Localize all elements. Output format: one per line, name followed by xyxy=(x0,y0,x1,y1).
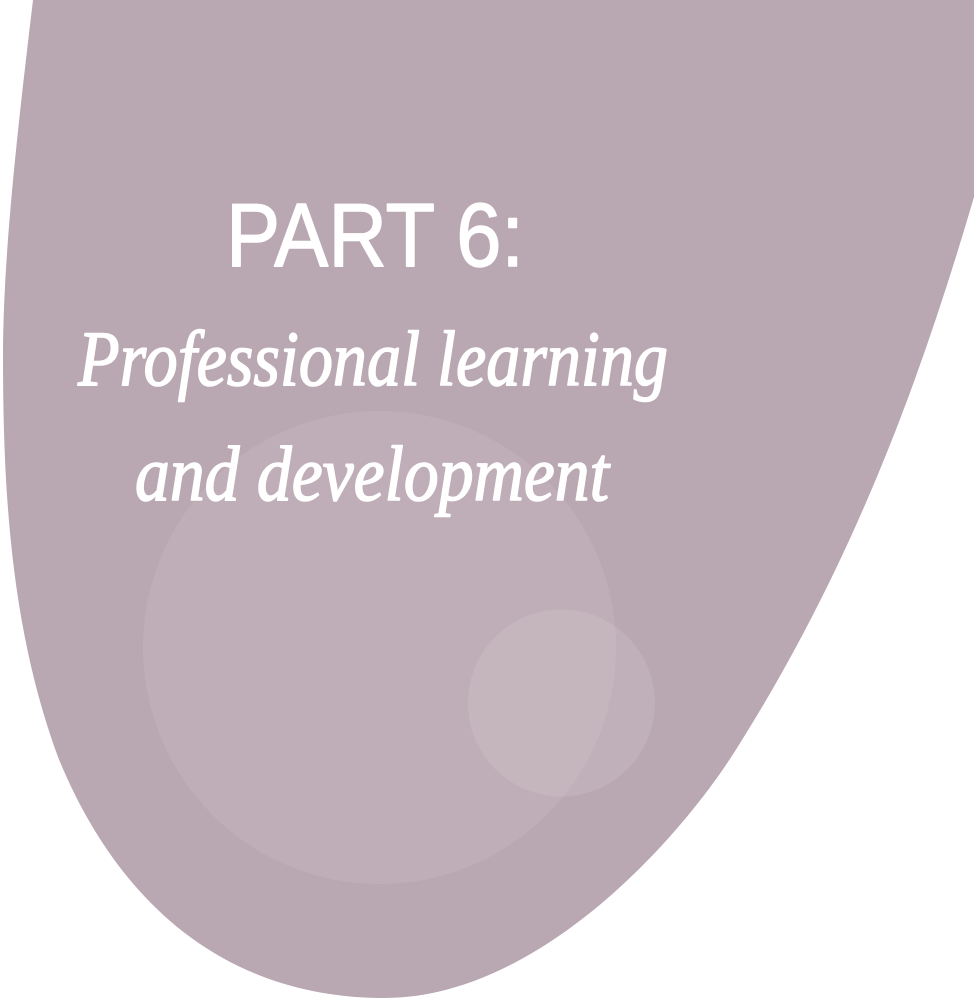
title: script subtitle xyxy=(77,315,668,517)
title line 2: and development xyxy=(135,430,611,517)
decorative small circle xyxy=(468,610,655,796)
decorative large circle xyxy=(143,411,616,884)
title line 1: Professional learning xyxy=(77,315,668,402)
heading: part number: PART 6: xyxy=(226,186,524,286)
